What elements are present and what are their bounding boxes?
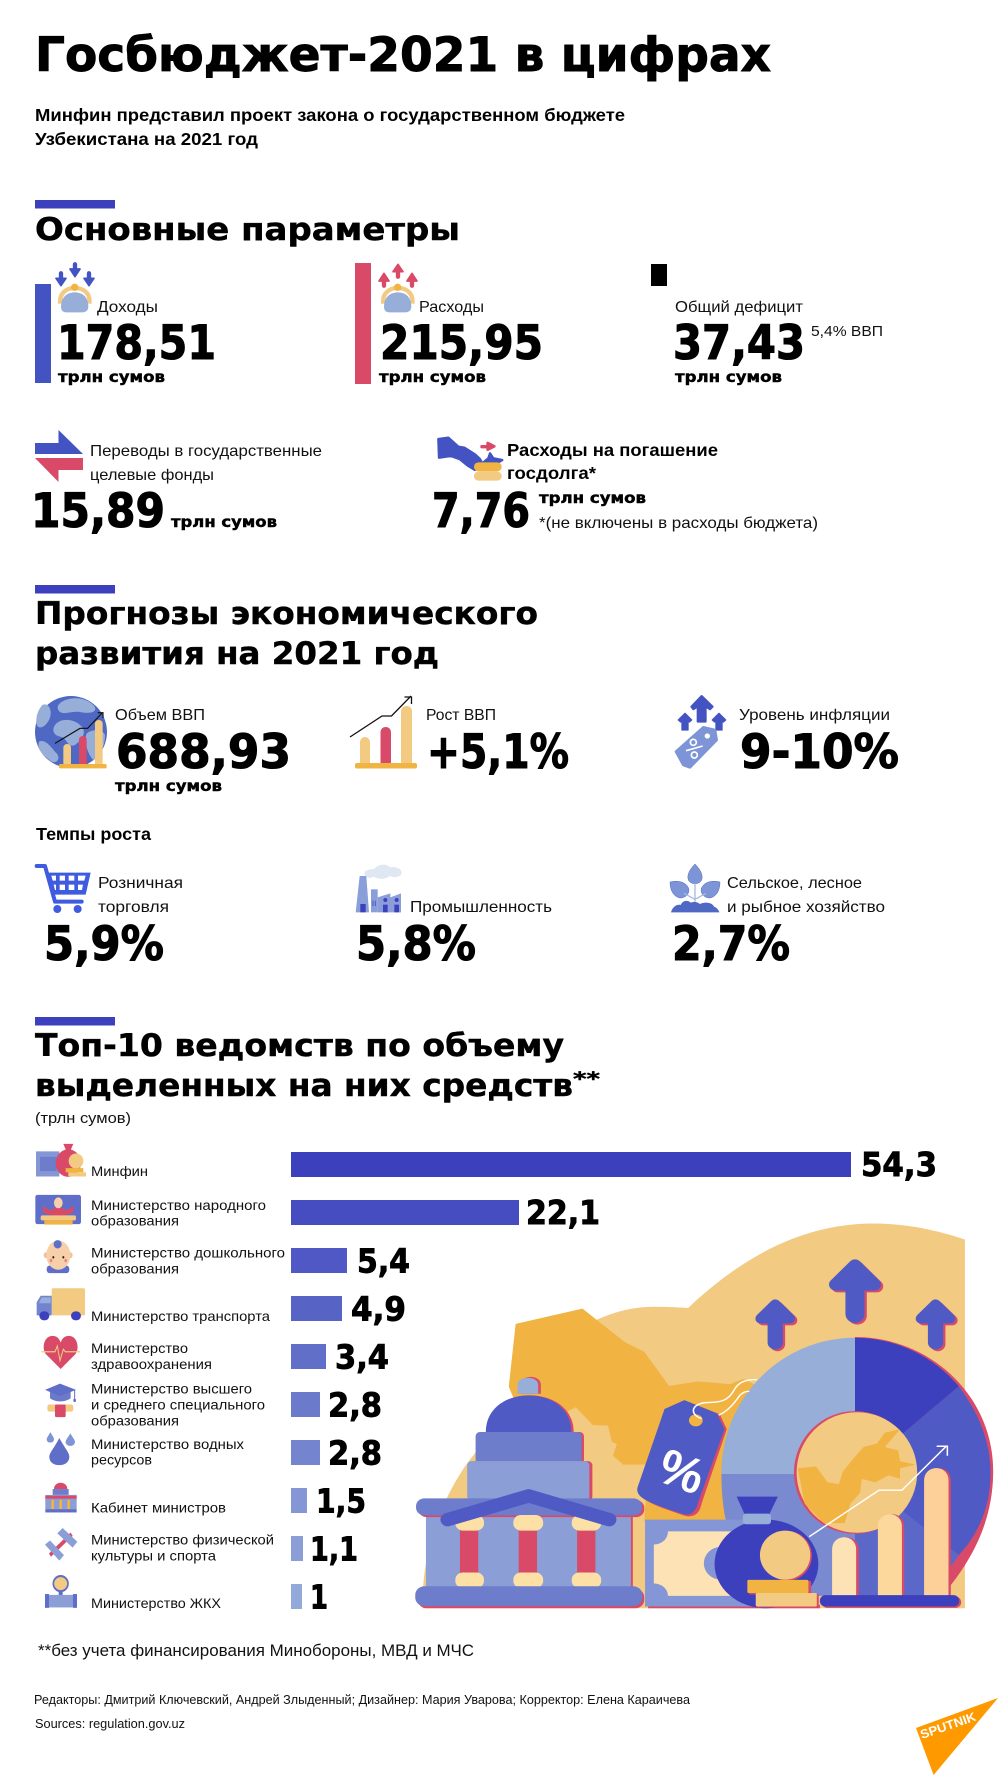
- deficit block: 5,4% ВВП: [811, 323, 883, 340]
- heading: forecasts: развития на 2021 год: [35, 636, 439, 672]
- subheading: growth rates: Темпы роста: [36, 824, 151, 844]
- icon: growth chart: [350, 696, 417, 768]
- icon: graduation cap: [45, 1384, 76, 1417]
- row: Minfin: [36, 1144, 937, 1184]
- row: sports: Министерство физической: [91, 1532, 274, 1548]
- row: cabinet of ministers: [45, 1482, 366, 1520]
- heading: top 10: **: [573, 1068, 600, 1090]
- heading: top 10: [35, 1028, 600, 1104]
- credits: Редакторы: Дмитрий Ключевский, Андрей Злыденный; Дизайнер: Мария Уварова; Корректор: Елена Караичева: [34, 1693, 690, 1707]
- subtitle: Минфин представил проект закона о государственном бюджете: [35, 105, 625, 125]
- transfers block: Переводы в государственные: [90, 443, 322, 460]
- icon: baby: [44, 1240, 73, 1273]
- GDP volume: Объем ВВП: [115, 707, 205, 724]
- section marker: [35, 200, 115, 208]
- heading: top 10: Топ-10 ведомств по объему: [35, 1028, 564, 1064]
- row: Minfin: 54,3: [861, 1145, 937, 1184]
- row: health: здравоохранения: [91, 1356, 212, 1372]
- row: public education: Министерство народного: [91, 1197, 266, 1213]
- icon: price tag with arrows: [676, 696, 726, 767]
- income block: Доходы: [97, 299, 158, 316]
- price tag: [637, 1380, 757, 1516]
- inflation: [676, 696, 899, 780]
- row: sports: культуры и спорта: [91, 1548, 216, 1564]
- industry: 5,8%: [356, 917, 476, 972]
- unit note: (трлн сумов): [35, 1110, 131, 1127]
- capitol building: [415, 1377, 644, 1608]
- map of Uzbekistan: [509, 1309, 759, 1521]
- icon: heart: [41, 1336, 80, 1369]
- expenses block: [355, 263, 543, 386]
- agriculture: Сельское, лесное: [727, 875, 862, 892]
- debt repayment block: госдолга*: [507, 463, 596, 483]
- icon: globe with chart: [35, 696, 107, 768]
- row: higher education: Министерство высшего: [91, 1380, 252, 1396]
- row: public education: 22,1: [526, 1193, 600, 1232]
- icon: dumbbell: [45, 1528, 77, 1561]
- banknote: [645, 1520, 820, 1608]
- GDP volume: 688,93: [116, 725, 291, 780]
- bar chart: ministries: [35, 1144, 937, 1616]
- icon: teacher: [35, 1195, 81, 1225]
- row: preschool education: 5,4: [357, 1242, 410, 1280]
- row: higher education: [45, 1380, 382, 1428]
- income block: 178,51: [57, 316, 216, 371]
- growth arrows: [761, 1265, 952, 1344]
- subtitle: [35, 105, 625, 149]
- row: transport: [37, 1288, 406, 1328]
- deficit block: Общий дефицит: [675, 299, 804, 316]
- row: housing and utilities: Министерство ЖКХ: [91, 1595, 222, 1611]
- GDP growth: Рост ВВП: [426, 707, 496, 724]
- row: health: 3,4: [335, 1338, 389, 1376]
- icon: factory: [356, 865, 402, 912]
- row: transport: Министерство транспорта: [91, 1308, 270, 1324]
- row: sports: 1,1: [310, 1530, 358, 1568]
- retail: торговля: [98, 899, 169, 916]
- agriculture: [670, 864, 885, 972]
- icon: purse with arrows down: [56, 264, 94, 312]
- money bag: [715, 1497, 819, 1608]
- row: higher education: и среднего специального: [91, 1396, 265, 1412]
- row: health: [41, 1336, 389, 1376]
- illustration: budget, building, chart and arrows: [415, 1224, 993, 1608]
- percent sign on tag: %: [651, 1438, 712, 1506]
- icon: plant: [670, 864, 720, 912]
- section marker: [35, 585, 115, 594]
- income block: [35, 264, 216, 386]
- row: health: Министерство: [91, 1340, 188, 1356]
- debt repayment block: [432, 438, 818, 539]
- row: sports: [45, 1528, 358, 1568]
- transfers block: [31, 430, 322, 539]
- heading: forecasts: [35, 596, 538, 672]
- credits: [34, 1693, 690, 1731]
- row: water resources: 2,8: [328, 1434, 382, 1472]
- retail: [37, 866, 183, 972]
- agriculture: 2,7%: [672, 917, 790, 972]
- footnote: **без учета финансирования Минобороны, МВД и МЧС: [38, 1641, 474, 1660]
- industry: Промышленность: [410, 899, 552, 916]
- panel: top 10 ministries: [35, 1017, 937, 1616]
- inflation: 9-10%: [740, 725, 899, 780]
- row: preschool education: образования: [91, 1260, 179, 1276]
- GDP growth: [350, 696, 569, 780]
- debt repayment block: Расходы на погашение: [507, 440, 718, 460]
- inflation: Уровень инфляции: [739, 707, 890, 724]
- GDP volume: трлн сумов: [115, 777, 222, 795]
- bar illustration with trend arrow: [809, 1446, 961, 1608]
- row: public education: образования: [91, 1212, 179, 1228]
- transfers block: 15,89: [31, 484, 165, 539]
- transfers block: трлн сумов: [171, 513, 277, 531]
- icon: purse with arrows up: [379, 264, 417, 312]
- row: housing and utilities: [45, 1576, 328, 1616]
- credits: Sources: regulation.gov.uz: [35, 1717, 185, 1731]
- heading: forecasts: Прогнозы экономического: [35, 596, 538, 632]
- icon: pipe with gauge: [45, 1576, 77, 1608]
- subtitle: Узбекистана на 2021 год: [35, 129, 258, 149]
- row: cabinet of ministers: Кабинет министров: [91, 1500, 226, 1516]
- deficit block: [651, 264, 883, 386]
- row: water resources: [47, 1432, 382, 1472]
- expenses block: Расходы: [419, 299, 484, 316]
- heading: main parameters: Основные параметры: [35, 212, 460, 248]
- icon: shopping cart: [37, 866, 91, 913]
- panel: forecasts: [35, 585, 899, 972]
- deficit block: трлн сумов: [675, 368, 782, 386]
- icon: map with coins: [438, 438, 502, 481]
- row: preschool education: Министерство дошкольного: [91, 1244, 285, 1260]
- row: housing and utilities: 1: [310, 1578, 328, 1616]
- row: Minfin: Минфин: [91, 1163, 148, 1179]
- expenses block: трлн сумов: [379, 368, 486, 386]
- debt repayment block: 7,76: [432, 484, 530, 539]
- expenses block: 215,95: [380, 316, 543, 371]
- agriculture: и рыбное хозяйство: [727, 899, 885, 916]
- GDP growth: +5,1%: [427, 725, 569, 780]
- donut chart: [721, 1337, 993, 1596]
- icon: government building: [45, 1483, 77, 1512]
- row: transport: 4,9: [351, 1290, 406, 1328]
- icon: water drops: [47, 1432, 75, 1465]
- row: water resources: Министерство водных: [91, 1436, 244, 1452]
- icon: money and bag: [36, 1144, 86, 1177]
- icon: truck: [37, 1288, 85, 1320]
- logo: Sputnik: [916, 1698, 998, 1775]
- debt repayment block: трлн сумов: [539, 489, 646, 507]
- row: preschool education: [44, 1240, 410, 1280]
- row: cabinet of ministers: 1,5: [316, 1482, 366, 1520]
- transfers block: целевые фонды: [90, 467, 214, 484]
- title: Госбюджет-2021 в цифрах: [35, 28, 771, 83]
- logo: Sputnik: SPUTNIK: [918, 1710, 978, 1742]
- GDP volume: [35, 696, 291, 795]
- retail: 5,9%: [44, 917, 164, 972]
- row: higher education: 2,8: [328, 1386, 382, 1424]
- row: water resources: ресурсов: [91, 1452, 152, 1468]
- background hills: [423, 1224, 965, 1608]
- debt repayment block: *(не включены в расходы бюджета): [539, 515, 818, 532]
- panel: main parameters: [31, 200, 883, 539]
- income block: трлн сумов: [58, 368, 165, 386]
- section marker: [35, 1017, 115, 1026]
- deficit block: 37,43: [673, 316, 805, 371]
- retail: Розничная: [98, 875, 183, 892]
- row: public education: [35, 1193, 600, 1232]
- heading: top 10: выделенных на них средств: [35, 1068, 573, 1104]
- industry: [356, 865, 552, 972]
- icon: transfer arrows: [35, 430, 83, 482]
- row: higher education: образования: [91, 1412, 179, 1428]
